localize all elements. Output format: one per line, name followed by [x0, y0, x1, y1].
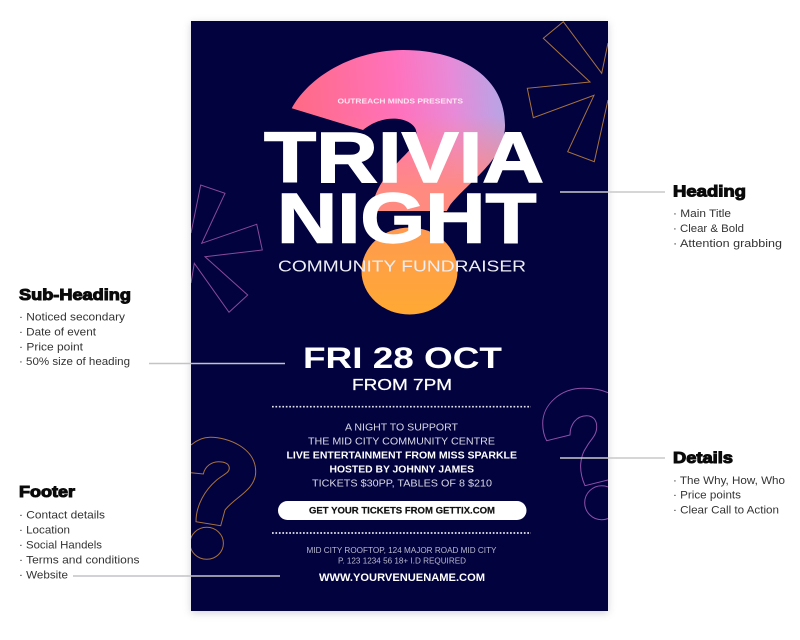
icon: purple asterisk outline [191, 185, 262, 312]
annotation: heading: · Clear & Bold [673, 223, 744, 235]
title [264, 118, 544, 258]
annotation: details: · The Why, How, Who [673, 475, 785, 487]
subtitle: COMMUNITY FUNDRAISER [278, 259, 526, 276]
call to action button: GET YOUR TICKETS FROM GETTIX.COM [309, 506, 495, 517]
footer text block: P. 123 1234 56 18+ I.D REQUIRED [338, 556, 466, 565]
annotation: heading: · Attention grabbing [673, 238, 782, 250]
details text block: HOSTED BY JOHNNY JAMES [330, 464, 474, 476]
annotation: sub-heading: · Price point [19, 342, 83, 354]
title: NIGHT [277, 178, 536, 258]
leader line: heading [560, 191, 665, 193]
details text block: THE MID CITY COMMUNITY CENTRE [308, 436, 495, 448]
annotation: footer: · Website [19, 570, 68, 582]
annotation: details [673, 450, 785, 516]
details text block: A NIGHT TO SUPPORT [345, 422, 459, 434]
annotation: footer: · Social Handels [19, 540, 103, 552]
annotation: sub-heading: · Noticed secondary [19, 312, 126, 324]
footer text block: WWW.YOURVENUENAME.COM [319, 572, 485, 584]
icon: orange question outline [190, 437, 256, 559]
details text block [272, 407, 531, 490]
annotation: footer: · Location [19, 524, 70, 536]
annotation: details: Details [673, 450, 733, 467]
annotation: heading: Heading [673, 184, 746, 201]
annotation: sub-heading [19, 287, 131, 368]
footer text block: MID CITY ROOFTOP, 124 MAJOR ROAD MID CITY [306, 546, 497, 555]
details text block: LIVE ENTERTAINMENT FROM MISS SPARKLE [286, 450, 517, 462]
icon: gradient question mark [292, 50, 505, 314]
date heading [303, 342, 502, 394]
poster [190, 21, 619, 613]
annotation: details: · Price points [673, 490, 742, 502]
icon: orange asterisk outline [527, 22, 608, 162]
annotation: footer [19, 484, 140, 582]
footer text block [272, 533, 531, 584]
leader line: footer [73, 575, 280, 577]
leader line: sub-heading [149, 362, 285, 364]
annotation: sub-heading: · Date of event [19, 326, 96, 338]
details text block: TICKETS $30PP, TABLES OF 8 $210 [312, 478, 492, 490]
annotation: heading: · Main Title [673, 208, 731, 220]
annotation: details: · Clear Call to Action [673, 504, 779, 516]
text: presenter line: OUTREACH MINDS PRESENTS [338, 96, 463, 105]
icon: purple question outline [542, 388, 608, 520]
call to action button [278, 501, 526, 520]
annotation: heading [673, 184, 782, 250]
title: TRIVIA [264, 118, 544, 198]
date heading: FROM 7PM [352, 377, 452, 394]
leader line: details [560, 457, 665, 459]
annotation: sub-heading: Sub-Heading [19, 287, 131, 304]
annotation: sub-heading: · 50% size of heading [19, 356, 130, 368]
annotation: footer: · Contact details [19, 510, 106, 522]
date heading: FRI 28 OCT [303, 342, 502, 375]
annotation: footer: Footer [19, 484, 75, 501]
annotation: footer: · Terms and conditions [19, 554, 140, 566]
